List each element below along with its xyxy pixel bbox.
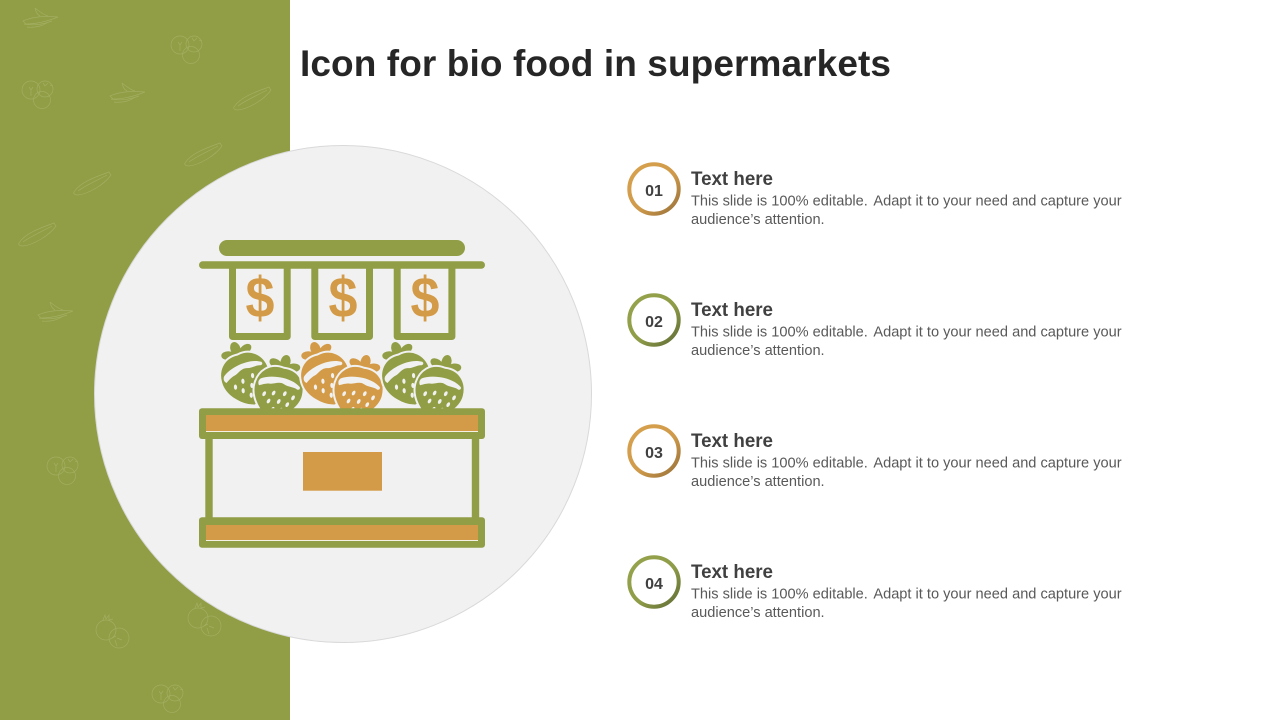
- number badge 03: 03: [645, 445, 663, 462]
- item text 01: audience’s attention.: [691, 212, 825, 228]
- strawberries: orange pair centre: [290, 334, 391, 426]
- item text 03: This slide is 100% editable.: [691, 456, 868, 472]
- stall roof bar: [219, 240, 465, 256]
- counter posts: [205, 436, 479, 520]
- item text 01: This slide is 100% editable.: [691, 194, 868, 210]
- counter sign: [303, 452, 382, 491]
- title: Icon for bio food in supermarkets: [300, 43, 891, 84]
- item text 04: audience’s attention.: [691, 605, 825, 621]
- list item 04: [629, 557, 1126, 621]
- strawberries: green pair right: [371, 334, 472, 426]
- price banner 1: [232, 266, 287, 336]
- item text 03: audience’s attention.: [691, 474, 825, 490]
- strawberries: green pair left: [210, 334, 311, 426]
- item heading 03: Text here: [691, 431, 773, 452]
- item text 04: This slide is 100% editable.: [691, 586, 868, 602]
- number badge 03: [629, 426, 679, 476]
- number badge 01: 01: [645, 183, 663, 200]
- number badge 04: [629, 557, 679, 607]
- item heading 01: Text here: [691, 169, 773, 190]
- price banner 3: $: [411, 266, 439, 330]
- number badge 01: [629, 164, 679, 214]
- green side panel: [0, 0, 290, 720]
- stall rail: [199, 261, 485, 269]
- item text 03: Adapt it to your need and capture your: [873, 456, 1122, 472]
- number badge 02: 02: [645, 314, 663, 331]
- price banner 2: $: [329, 266, 357, 330]
- list item 01: [629, 164, 1126, 228]
- item heading 04: Text here: [691, 562, 773, 583]
- item text 02: audience’s attention.: [691, 343, 825, 359]
- item text 02: Adapt it to your need and capture your: [873, 324, 1122, 340]
- price banner 1: $: [246, 266, 274, 330]
- item text 01: Adapt it to your need and capture your: [873, 194, 1122, 210]
- icon: supermarket food stall: [199, 240, 485, 548]
- counter top band: [199, 408, 485, 439]
- item text 04: Adapt it to your need and capture your: [873, 586, 1122, 602]
- price banner 3: [397, 266, 452, 336]
- list item 03: [629, 426, 1126, 490]
- large grey circle: [94, 146, 592, 642]
- number badge 02: [629, 295, 679, 345]
- background pattern: vegetable doodles: [19, 8, 271, 712]
- number badge 04: 04: [645, 576, 663, 593]
- list item 02: [629, 295, 1126, 359]
- item heading 02: Text here: [691, 300, 773, 321]
- counter bottom band: [199, 517, 485, 548]
- price banner 2: [315, 266, 370, 336]
- item text 02: This slide is 100% editable.: [691, 324, 868, 340]
